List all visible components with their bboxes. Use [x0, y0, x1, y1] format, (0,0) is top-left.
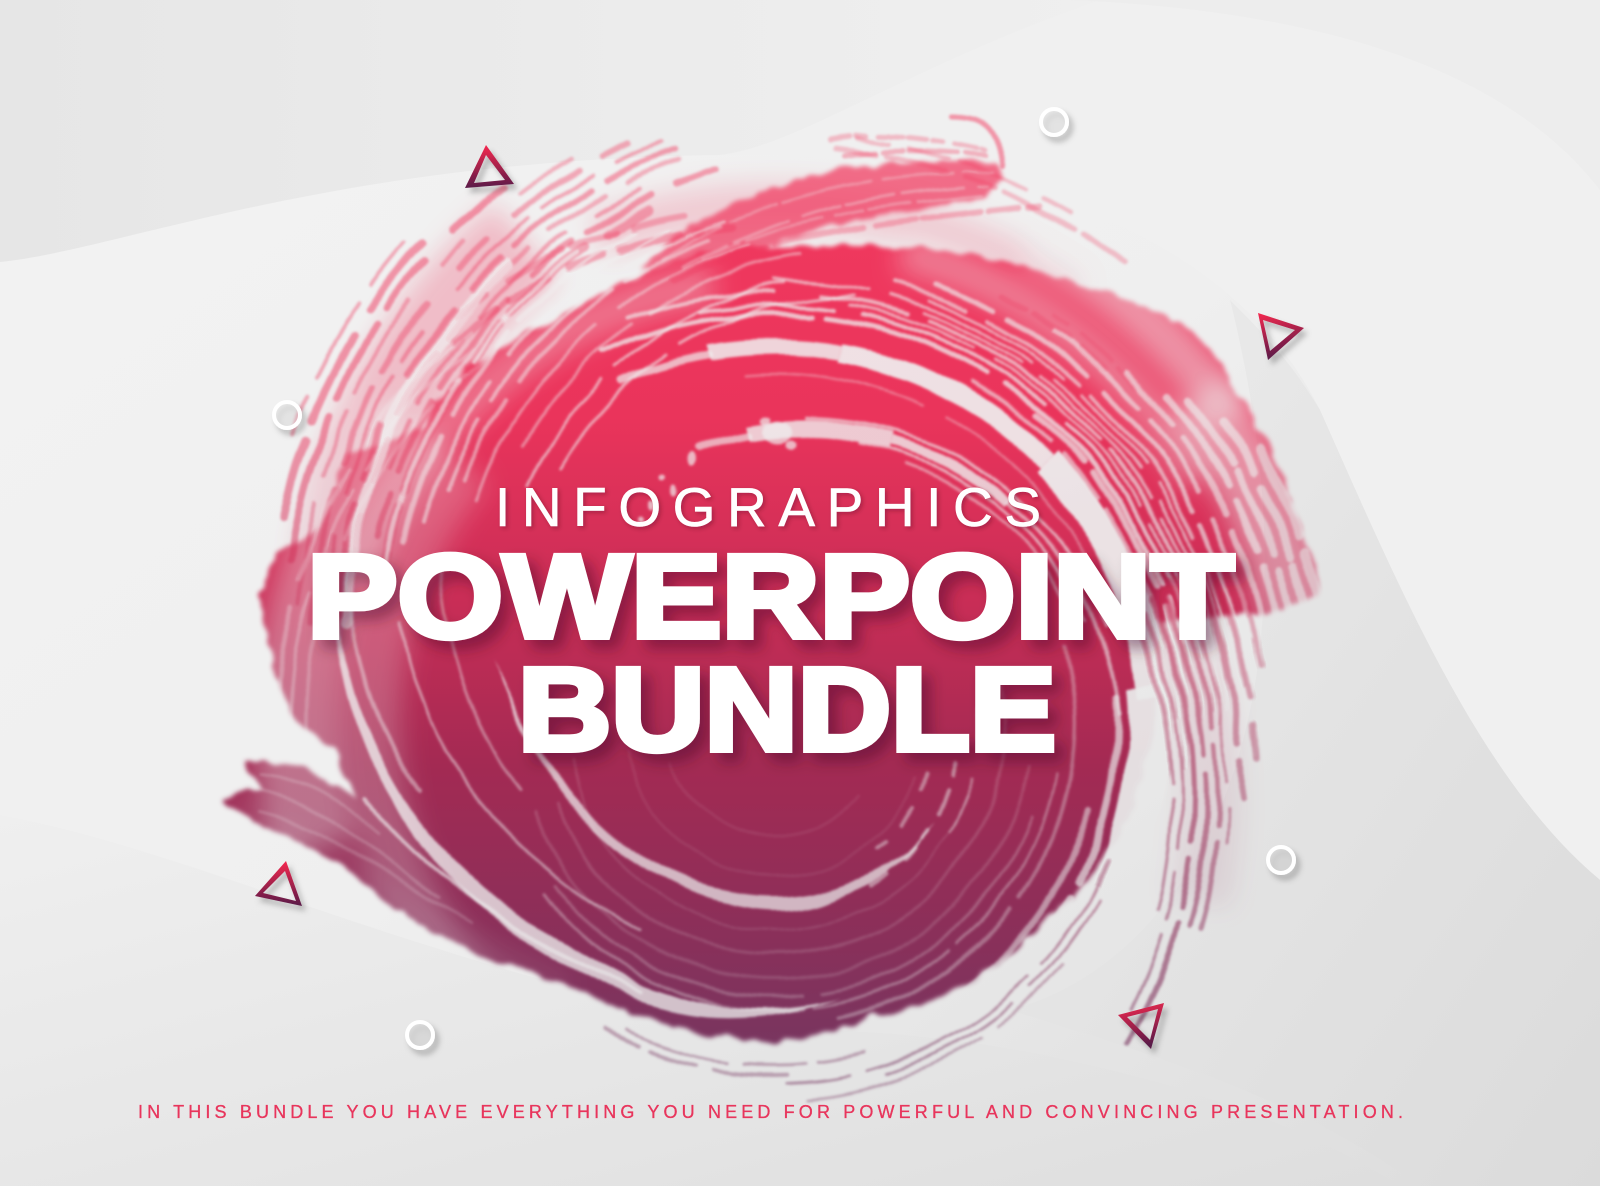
brush swirl	[220, 113, 1322, 1104]
icon: triangle top left	[465, 145, 514, 188]
tagline: IN THIS BUNDLE YOU HAVE EVERYTHING YOU NEED FOR POWERFUL AND CONVINCING PRESENTATION.	[138, 1102, 1403, 1122]
heading: BUNDLE: BUNDLE	[518, 644, 1056, 776]
icon: triangle bottom left	[255, 861, 302, 906]
icon: ring bottom	[407, 1022, 433, 1048]
icon: ring top	[1041, 109, 1067, 135]
icon: ring right	[1268, 847, 1294, 873]
icon: triangle bottom right	[1118, 1003, 1164, 1049]
icon: triangle right	[1258, 313, 1304, 360]
heading: POWERPOINT: POWERPOINT	[307, 531, 1234, 663]
icon: ring left	[274, 402, 300, 428]
subheading: INFOGRAPHICS: INFOGRAPHICS	[495, 476, 1041, 538]
